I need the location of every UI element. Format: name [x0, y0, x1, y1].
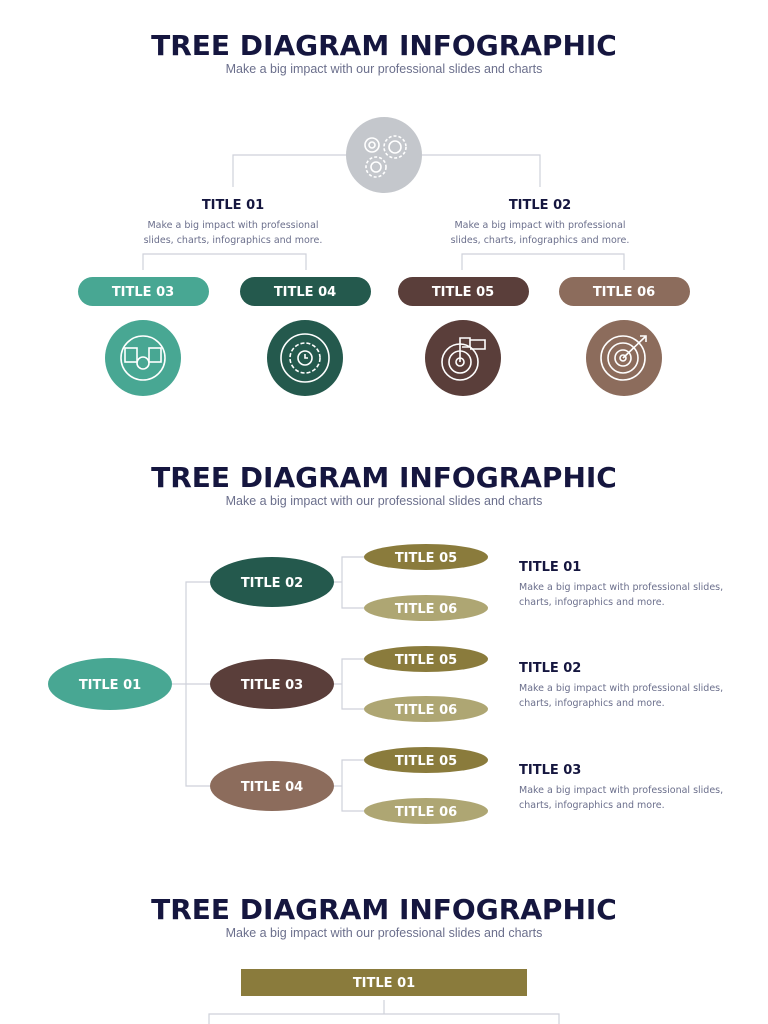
box: title 01: TITLE 01 [353, 976, 415, 991]
section 2 heading: Make a big impact with our professional slides and charts [226, 494, 542, 508]
icon: target flag [425, 320, 501, 396]
ellipse: title 02 [210, 557, 334, 607]
leaf ellipses group 3: TITLE 05 [395, 754, 457, 769]
ellipse: title 03 [210, 659, 334, 709]
text block: side title 03: charts, infographics and more. [519, 800, 665, 811]
pill: title 03: TITLE 03 [112, 285, 174, 300]
icon: gears root circle [346, 117, 422, 193]
ellipse: root title 01: TITLE 01 [79, 678, 141, 693]
pill: title 05 [398, 277, 529, 306]
pill: title 04: TITLE 04 [274, 285, 336, 300]
text block: side title 03 [519, 763, 723, 811]
leaf ellipses group 3: TITLE 06 [395, 805, 457, 820]
text block: title 01: TITLE 01 [202, 198, 264, 213]
ellipse: title 04 [210, 761, 334, 811]
icon: gear clock [267, 320, 343, 396]
connector lines top [143, 155, 624, 270]
ellipse: title 02: TITLE 02 [241, 576, 303, 591]
text block: side title 02: Make a big impact with professional slides, [519, 683, 723, 694]
text block: side title 02: TITLE 02 [519, 661, 581, 676]
ellipse: root title 01 [48, 658, 172, 710]
pill: title 05: TITLE 05 [432, 285, 494, 300]
text block: title 02: slides, charts, infographics and more. [451, 235, 629, 246]
leaf ellipses group 1: TITLE 06 [395, 602, 457, 617]
text block: side title 01: TITLE 01 [519, 560, 581, 575]
text block: title 01: Make a big impact with professional [147, 220, 319, 231]
section 2 heading: TREE DIAGRAM INFOGRAPHIC [151, 461, 617, 494]
text block: title 02: TITLE 02 [509, 198, 571, 213]
leaf ellipses group 1: TITLE 05 [395, 551, 457, 566]
leaf ellipses group 2 [364, 646, 488, 722]
section 1 heading: TREE DIAGRAM INFOGRAPHIC [151, 29, 617, 62]
pill: title 04 [240, 277, 371, 306]
pill: title 06 [559, 277, 690, 306]
text block: side title 03: TITLE 03 [519, 763, 581, 778]
connector lines bottom [209, 1000, 559, 1024]
ellipse: title 03: TITLE 03 [241, 678, 303, 693]
section 3 heading: TREE DIAGRAM INFOGRAPHIC [151, 893, 617, 926]
section 3 heading: Make a big impact with our professional slides and charts [226, 926, 542, 940]
text block: title 01: slides, charts, infographics and more. [144, 235, 322, 246]
leaf ellipses group 2: TITLE 05 [395, 653, 457, 668]
text block: side title 01: Make a big impact with professional slides, [519, 582, 723, 593]
section 1 heading: Make a big impact with our professional slides and charts [226, 62, 542, 76]
ellipse: title 04: TITLE 04 [241, 780, 303, 795]
pill: title 06: TITLE 06 [593, 285, 655, 300]
text block: title 02: Make a big impact with professional [454, 220, 626, 231]
text block: side title 02: charts, infographics and more. [519, 698, 665, 709]
text block: side title 03: Make a big impact with professional slides, [519, 785, 723, 796]
leaf ellipses group 2: TITLE 06 [395, 703, 457, 718]
leaf ellipses group 1 [364, 544, 488, 621]
icon: coins [105, 320, 181, 396]
text block: title 01 [144, 198, 322, 246]
connector lines horizontal tree [172, 557, 364, 811]
text block: title 02 [451, 198, 629, 246]
pill: title 03 [78, 277, 209, 306]
text block: side title 01 [519, 560, 723, 608]
leaf ellipses group 3 [364, 747, 488, 824]
text block: side title 02 [519, 661, 723, 709]
text block: side title 01: charts, infographics and more. [519, 597, 665, 608]
box: title 01 [241, 969, 527, 996]
icon: target arrow [586, 320, 662, 396]
